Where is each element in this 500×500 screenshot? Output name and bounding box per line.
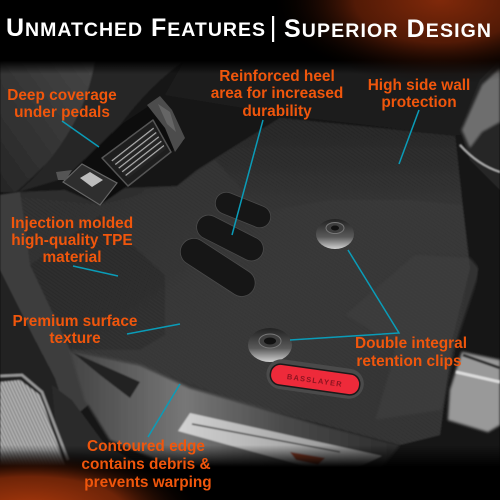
speaker grille	[0, 380, 65, 465]
label: reinforced heel: Reinforced heel	[219, 68, 335, 85]
title: UNMATCHED FEATURES	[6, 14, 265, 42]
red logo badge: BASSLAYER	[286, 372, 343, 389]
high side wall	[215, 118, 462, 212]
seat	[460, 60, 500, 190]
label: injection molded: material	[42, 249, 102, 266]
black carpet	[150, 95, 280, 186]
label: injection molded: high-quality TPE	[11, 232, 133, 249]
label: reinforced heel: area for increased	[211, 85, 343, 102]
left mat panel shade	[30, 215, 165, 350]
mat weave texture	[0, 118, 470, 445]
small pedal	[56, 164, 117, 205]
label: high side wall: protection	[381, 94, 457, 111]
left pillar trim	[0, 192, 100, 420]
label: reinforced heel: durability	[242, 103, 312, 120]
accelerator pedal	[147, 96, 185, 152]
top black band	[0, 0, 500, 74]
heel pad slots	[175, 189, 274, 302]
red plate mark	[290, 452, 325, 465]
pedal well shadow	[65, 105, 185, 205]
label: contoured edge: prevents warping	[84, 474, 212, 491]
raised right foot rest	[345, 255, 480, 420]
metal seat bracket	[448, 352, 500, 432]
retention clip upper	[316, 219, 354, 249]
bottom left orange glow	[0, 450, 240, 500]
label: high side wall: High side wall	[368, 77, 470, 94]
label: deep coverage: under pedals	[14, 104, 110, 121]
label: deep coverage: Deep coverage	[7, 87, 117, 104]
bottom black band	[0, 445, 500, 500]
door sill curve	[70, 350, 400, 470]
leader lines	[62, 110, 419, 437]
brake pedal	[102, 120, 171, 186]
label: premium surface: texture	[49, 330, 101, 347]
label: double integral clips: retention clips	[356, 353, 462, 370]
label: double integral clips: Double integral	[355, 335, 467, 352]
red logo badge	[265, 357, 366, 401]
mat main body	[0, 118, 470, 445]
sill dark recess	[72, 352, 140, 398]
label: contoured edge: Contoured edge	[87, 438, 205, 455]
upper floor region	[165, 60, 500, 135]
retention clip lower	[248, 328, 292, 362]
label: premium surface: Premium surface	[13, 313, 138, 330]
top right orange glow	[200, 0, 500, 84]
title: SUPERIOR DESIGN	[284, 15, 491, 43]
label: contoured edge: contains debris &	[81, 456, 211, 473]
label: injection molded: Injection molded	[11, 215, 133, 232]
stainless step plate	[178, 413, 382, 476]
carpet kick panel	[0, 60, 95, 192]
lower sill shadow	[52, 385, 150, 470]
title	[6, 14, 491, 43]
dark console curve	[18, 60, 185, 192]
right dark column	[462, 160, 500, 360]
